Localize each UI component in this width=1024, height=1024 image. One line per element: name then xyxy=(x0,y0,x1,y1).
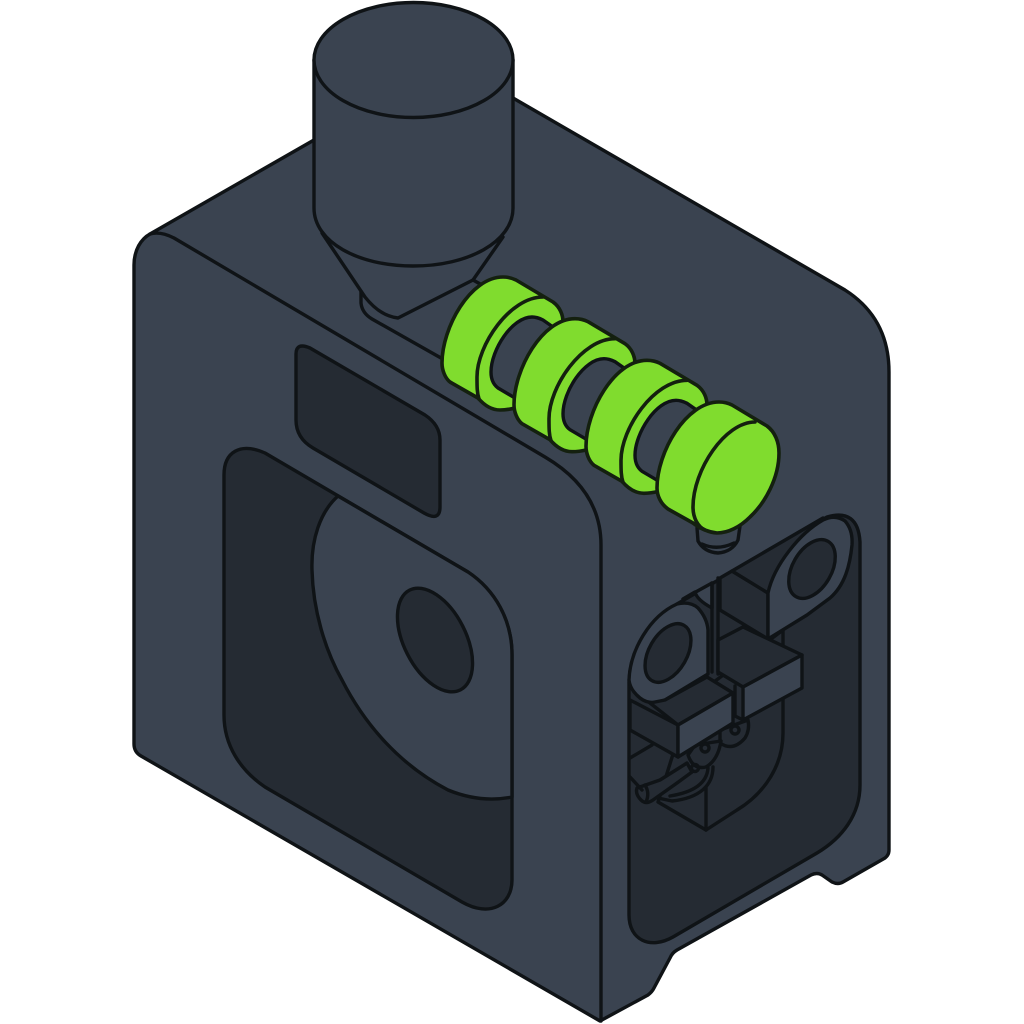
back bracket piece xyxy=(683,583,712,608)
large side recess with spool xyxy=(224,449,512,909)
front recess with mechanism xyxy=(629,515,860,943)
clips under blocks xyxy=(630,720,749,802)
spool hub xyxy=(382,576,488,704)
device body xyxy=(134,98,889,1021)
left lug hole xyxy=(636,616,700,690)
spool disc xyxy=(312,496,512,799)
left block xyxy=(630,677,733,757)
label recess xyxy=(296,346,440,516)
hopper cylinder and cone xyxy=(314,2,513,358)
green bar: disc 3 xyxy=(586,360,707,493)
left lug xyxy=(629,603,708,703)
right lug xyxy=(732,518,823,593)
green bar: disc 1 xyxy=(442,277,563,410)
right lug hole xyxy=(779,532,845,606)
lower housing xyxy=(658,630,783,830)
green bar: disc 2 xyxy=(514,319,635,452)
green knob: small nozzle under cap xyxy=(697,526,740,553)
right block xyxy=(718,627,802,720)
green bar: end cap xyxy=(657,402,779,533)
